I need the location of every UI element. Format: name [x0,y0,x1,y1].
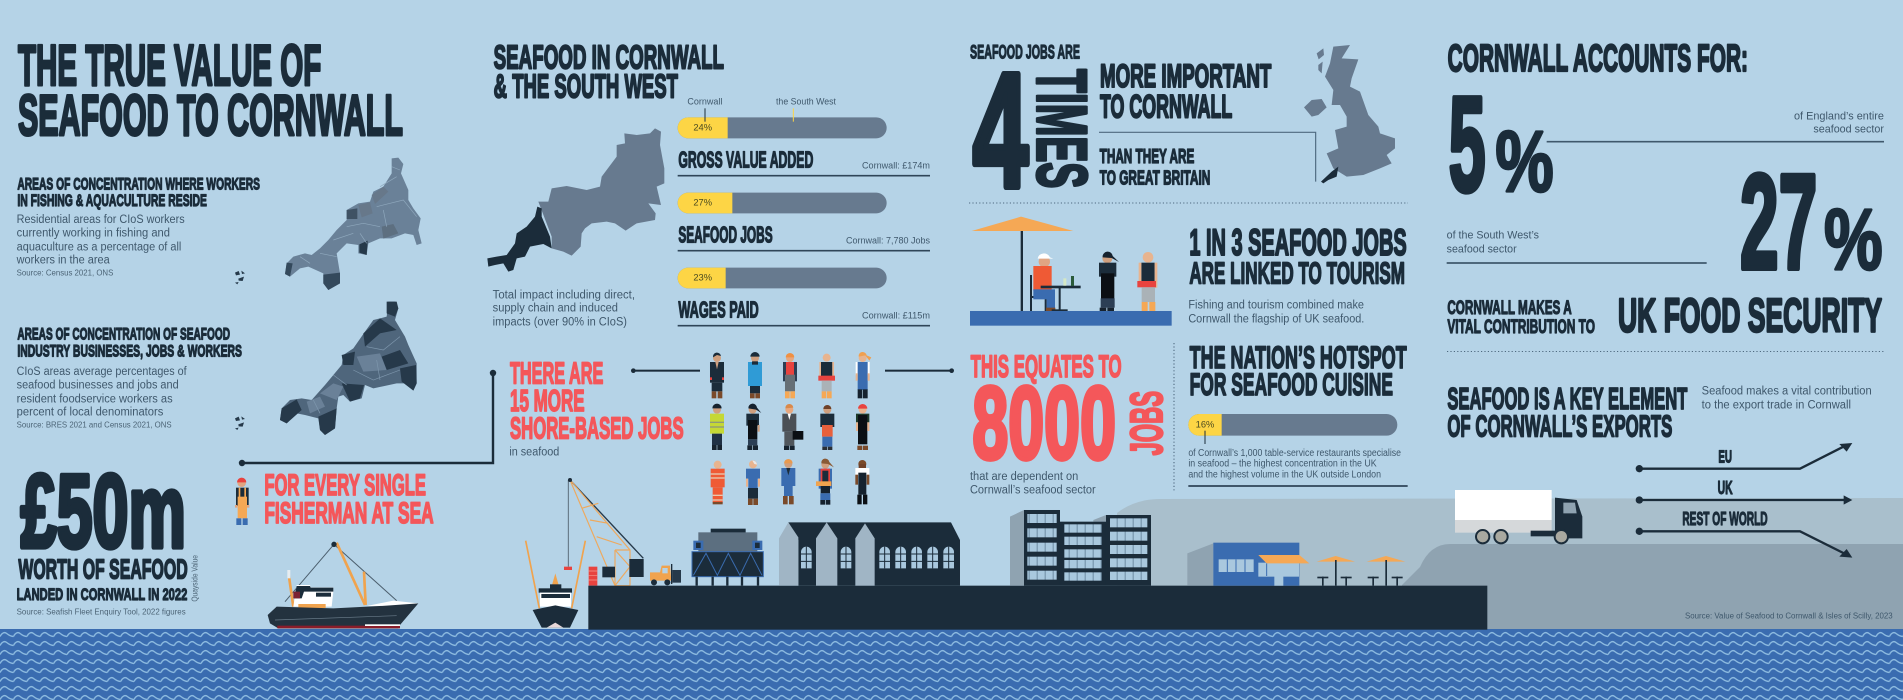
legend labels: the South West [776,96,836,106]
worker 11 orange overalls [711,461,725,504]
text: linked to tourism: Cornwall the flagship of UK seafood. [1188,311,1364,325]
legend labels [687,96,836,106]
worker 1 suit [710,353,724,398]
text block: areas of concentration of seafood industry: Source: BRES 2021 and Census 2021, ONS [17,419,172,429]
stat: 4 times [970,39,1102,222]
heading [494,39,724,106]
text block: £50m landed: WORTH OF SEAFOOD [18,554,188,585]
map: South West with Cornwall highlighted [487,128,664,272]
stat: 5 percent: seafood sector [1813,124,1884,136]
callout: 15 more shore-based jobs: THERE ARE [510,357,603,390]
panel: shore-based jobs [509,352,1487,630]
map: Cornwall workers residence [235,158,422,290]
stat: 27 percent: seafood sector [1447,243,1517,255]
text: export trade [1702,384,1872,411]
panel: seafood in Cornwall and the South West [487,39,930,328]
illustration: cafe terrace [970,217,1172,326]
heading: nation's hotspot: THE NATION’S HOTSPOT [1190,339,1407,375]
icon: lorry [1455,490,1582,543]
text block: areas of concentration of seafood industry [17,325,242,429]
text: total impact [493,287,635,328]
text block: £50m landed [17,454,200,616]
stat: 27 percent: % [1824,193,1883,289]
bar: wages paid [678,268,930,326]
callout: 8000 jobs [970,349,1172,497]
bar: gross value added: GROSS VALUE ADDED [678,146,813,172]
callout: 8000 jobs: JOBS [1121,391,1172,455]
bar: wages paid: WAGES PAID [678,296,759,322]
bar: gross value added: Cornwall: £174m [862,160,930,170]
worker 2 blue coat [748,352,762,398]
building: long harbour hall with gables [779,522,960,586]
legend labels: Cornwall [687,96,722,106]
callout: 15 more shore-based jobs: 15 MORE [510,385,585,418]
callout: 15 more shore-based jobs [509,357,684,459]
map: Cornwall seafood industry [235,302,417,435]
hill: dark [1402,544,1903,629]
icon: moored boat front view [526,541,585,628]
heading: OF CORNWALL’S EXPORTS [1447,408,1672,443]
people: fifteen workers [710,352,871,505]
text block: areas of concentration where workers reside: Residential areas for CIoS workers [17,212,185,226]
icon: Isles of Scilly [235,271,245,284]
text: restaurants: of Cornwall’s 1,000 table-service restaurants specialise [1188,448,1401,459]
stat: 5 percent: % [1495,115,1554,211]
bar: seafood jobs [678,193,930,251]
text: more important [1100,58,1272,190]
title [18,34,403,148]
callout: for every single fisherman: FOR EVERY SINGLE [264,469,426,502]
callout: 15 more shore-based jobs: SHORE-BASED JOBS [510,412,684,445]
icon: fishing trawler [268,542,418,628]
heading: nation's hotspot: FOR SEAFOOD CUISINE [1190,366,1393,402]
icon: stacked red crates [589,567,597,586]
icon: fisherman [235,478,249,525]
text: UK food security: VITAL CONTRIBUTION TO [1447,317,1595,338]
stat: 5 percent [1449,69,1884,220]
panel: Cornwall accounts for [1447,38,1884,342]
callout: for every single fisherman: FISHERMAN AT SEA [264,497,434,530]
text block: £50m landed: Source: Seafish Fleet Enquiry Tool, 2022 figures [17,606,186,616]
callout: 8000 jobs: 8000 [972,365,1116,480]
panel: left column [16,34,493,628]
stat: 4 times: 4 [973,39,1028,222]
arrow: rest of world: REST OF WORLD [1682,508,1768,529]
divider: dotted lines [969,203,1884,492]
text block: £50m landed: £50m [21,454,186,570]
panel: exports [1447,381,1893,620]
heading [1447,381,1687,443]
bar: 16 percent: 16% [1196,420,1214,430]
heading: SEAFOOD IN CORNWALL [494,39,724,76]
text: linked to tourism: Fishing and tourism combined make [1188,298,1364,312]
worker 12 blue polo [746,460,760,505]
quay: dark harbour wall [588,586,1487,630]
connector lines [631,368,954,373]
stat: 4 times: TIMES [1023,69,1102,188]
text: UK food security: CORNWALL MAKES A [1447,298,1572,319]
text: more important: MORE IMPORTANT [1100,58,1272,94]
panel: 4 times more important [970,39,1407,326]
stat: 27 percent: of the South West’s [1447,230,1539,242]
stat: 5 percent: 5 [1449,69,1486,220]
icon: terrace parasols [1317,556,1405,586]
arrow: rest of world [1636,508,1852,558]
leader line [1099,132,1316,182]
connector line: to shore-based jobs [242,373,493,463]
bar: wages paid: Cornwall: £115m [862,311,930,321]
bar: gross value added [678,108,930,176]
callout: 8000 jobs: THIS EQUATES TO [971,349,1122,384]
heading: & THE SOUTH WEST [494,69,678,106]
worker 7 black apron [746,404,761,450]
text: linked to tourism [1188,222,1407,325]
bar: 16 percent [1188,414,1397,444]
text: total impact: Total impact including direct, [493,287,635,301]
arrow: UK: UK [1718,477,1733,498]
worker 6 hi-vis [710,404,724,450]
text block: areas of concentration of seafood industry: AREAS OF CONCENTRATION OF SEAFOOD [17,325,230,344]
icon: crane [564,478,644,586]
callout: 15 more shore-based jobs: in seafood [509,445,559,459]
text block: £50m landed: Quayside Value [190,555,200,602]
text block: areas of concentration where workers reside [16,174,260,277]
callout: 8000 jobs: Cornwall’s seafood sector [970,483,1096,497]
decorative dots on connector [239,460,245,466]
arrow: UK [1636,477,1852,505]
text block: areas of concentration of seafood industry: seafood businesses and jobs and [17,378,179,392]
text: restaurants: in seafood – the highest concentration in the UK [1188,459,1377,470]
text: export trade: to the export trade in Cornwall [1702,397,1851,411]
arrow: EU [1636,443,1852,472]
text block: areas of concentration of seafood industry: resident foodservice workers as [17,391,173,405]
title: SEAFOOD TO CORNWALL [18,84,403,148]
callout: 8000 jobs: that are dependent on [970,469,1078,483]
icon: forklift [650,564,681,585]
text: more important: TO CORNWALL [1100,89,1232,125]
text block: areas of concentration where workers reside: currently working in fishing and [17,226,170,240]
text: total impact: supply chain and induced [493,301,618,315]
text: more important: TO GREAT BRITAIN [1100,168,1210,190]
text: restaurants [1188,448,1408,486]
heading: SEAFOOD IS A KEY ELEMENT [1447,381,1687,416]
building: seafood restaurant [1187,543,1309,586]
text: UK food security [1447,289,1882,342]
title: THE TRUE VALUE OF [18,34,321,98]
worker 15 long hair apron [855,460,869,504]
stat: 27 percent: 27 [1740,146,1817,297]
arrow: EU: EU [1718,447,1732,467]
sea [0,629,1903,700]
stat: 27 percent [1447,146,1883,297]
text block: areas of concentration of seafood industry: CIoS areas average percentages of [17,364,187,378]
building: apartment block [1010,510,1151,586]
bar: seafood jobs: 27% [693,198,712,208]
worker 3 grey overall [783,353,797,398]
text block: areas of concentration where workers reside: workers in the area [16,253,110,267]
text block: areas of concentration where workers reside: AREAS OF CONCENTRATION WHERE WORKERS [17,174,260,193]
text block: £50m landed: LANDED IN CORNWALL IN 2022 [17,585,187,604]
heading: nation's hotspot [1190,339,1407,402]
text block: areas of concentration of seafood industry: INDUSTRY BUSINESSES, JOBS & WORKERS [17,341,242,360]
bar: gross value added: 24% [693,123,712,133]
text: more important: THAN THEY ARE [1100,146,1194,168]
text block: areas of concentration where workers reside: IN FISHING & AQUACULTURE RESIDE [17,191,207,210]
text: linked to tourism: 1 IN 3 SEAFOOD JOBS [1189,222,1407,263]
icon: Isles of Scilly [235,416,245,430]
bar: wages paid: 23% [693,273,712,283]
text: linked to tourism: ARE LINKED TO TOURISM [1189,257,1405,290]
worker 14 fishmonger with crate [816,459,834,505]
text block: areas of concentration where workers reside: Source: Census 2021, ONS [17,267,114,277]
worker 4 red apron [818,354,835,398]
worker 9 orange apron [820,405,834,450]
hill: light [1117,498,1903,629]
worker 5 blue dungarees [856,352,871,398]
text block: areas of concentration of seafood industry: percent of local denominators [17,405,163,419]
text: export trade: Seafood makes a vital contribution [1702,384,1872,398]
stat: 5 percent: of England’s entire [1794,110,1884,122]
building: fish market on stilts [692,529,763,586]
worker 13 blue suit [781,459,795,504]
panel: 8000 jobs and hotspot [970,339,1408,586]
bar: seafood jobs: SEAFOOD JOBS [678,221,773,247]
text: restaurants: and the highest volume in the UK outside London [1188,470,1381,481]
text: total impact: impacts (over 90% in CIoS) [493,314,627,328]
source note: Source: Value of Seafood to Cornwall & Isles of Scilly, 2023 [1685,611,1893,620]
callout: for every single fisherman [264,469,434,530]
worker 10 red cap [856,404,869,450]
bar: seafood jobs: Cornwall: 7,780 Jobs [846,236,930,246]
text block: areas of concentration where workers reside: aquaculture as a percentage of all [17,239,181,253]
worker 8 grey suit with briefcase [782,404,803,450]
map: UK [1304,45,1395,183]
stat: 4 times: SEAFOOD JOBS ARE [970,41,1080,63]
